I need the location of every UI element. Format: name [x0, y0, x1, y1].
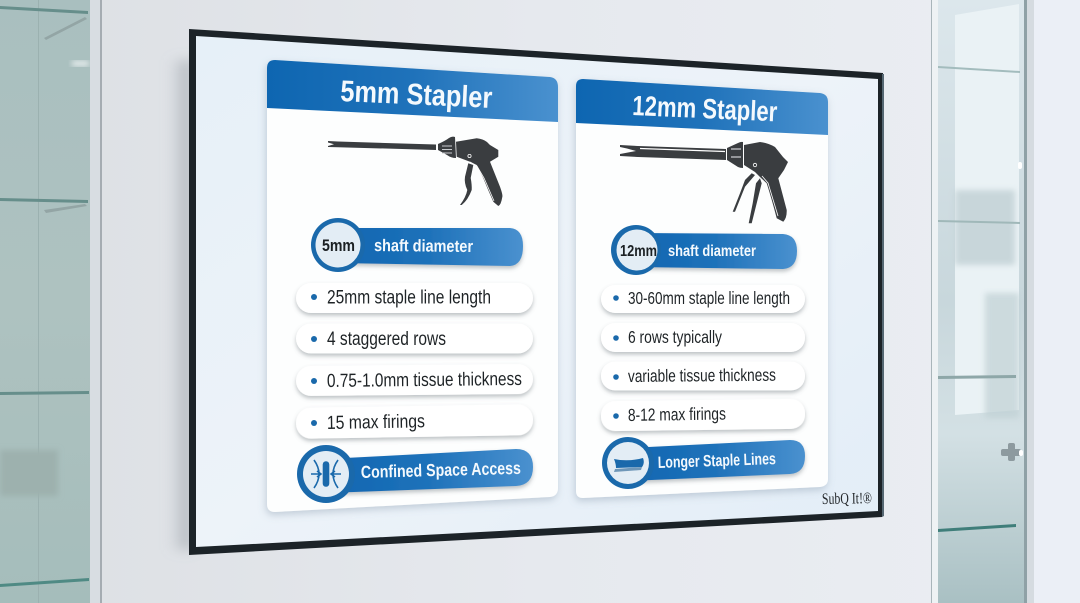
feature: tissue thickness: [296, 364, 533, 396]
feature: max firings: [601, 399, 805, 431]
feature: max firings: 8-12 max firings: [628, 403, 726, 425]
feature: rows: [296, 324, 533, 354]
logo: SubQ It!: SubQ It!®: [822, 490, 872, 508]
icon: confined space arrows: [311, 460, 341, 488]
shaft diameter badge: [311, 218, 523, 272]
left glass cabinet: [0, 0, 102, 603]
icon: 12mm stapler: [620, 142, 788, 223]
header band: [576, 79, 828, 135]
feature: tissue thickness: [601, 362, 805, 390]
panel: 12mm stapler: [576, 79, 828, 498]
callout: longer staple lines: Longer Staple Lines: [658, 450, 776, 472]
callout: confined space access: [297, 445, 533, 503]
icon: 5mm stapler: [328, 137, 502, 206]
feature: staple line length: 30-60mm staple line length: [628, 288, 790, 308]
shaft diameter badge: [611, 225, 797, 275]
feature: rows: [601, 323, 805, 352]
feature: tissue thickness: variable tissue thickness: [628, 365, 776, 386]
shaft diameter badge: shaft diameter: [374, 236, 473, 256]
right glass cabinet: [931, 0, 1080, 603]
feature: staple line length: [601, 285, 805, 313]
heading: 5mm Stapler: [340, 75, 493, 115]
card body: [576, 79, 828, 498]
callout: longer staple lines: [602, 437, 805, 489]
feature: tissue thickness: 0.75-1.0mm tissue thickness: [327, 369, 522, 392]
shaft diameter badge: 12mm: [620, 243, 657, 260]
header band: [267, 60, 558, 122]
monitor: [168, 29, 884, 555]
shaft diameter badge: shaft diameter: [668, 243, 756, 260]
icon: staple line: [614, 458, 644, 472]
feature: staple line length: [296, 283, 533, 313]
heading: 12mm Stapler: [632, 90, 778, 127]
card body: [267, 60, 558, 512]
feature: rows: 6 rows typically: [628, 327, 722, 347]
feature: rows: 4 staggered rows: [327, 329, 446, 350]
panel: 5mm stapler: [267, 60, 558, 512]
feature: max firings: [296, 404, 533, 439]
callout: confined space access: Confined Space Access: [361, 458, 521, 482]
feature: max firings: 15 max firings: [327, 411, 425, 434]
shaft diameter badge: 5mm: [322, 236, 355, 255]
feature: staple line length: 25mm staple line length: [327, 288, 491, 308]
